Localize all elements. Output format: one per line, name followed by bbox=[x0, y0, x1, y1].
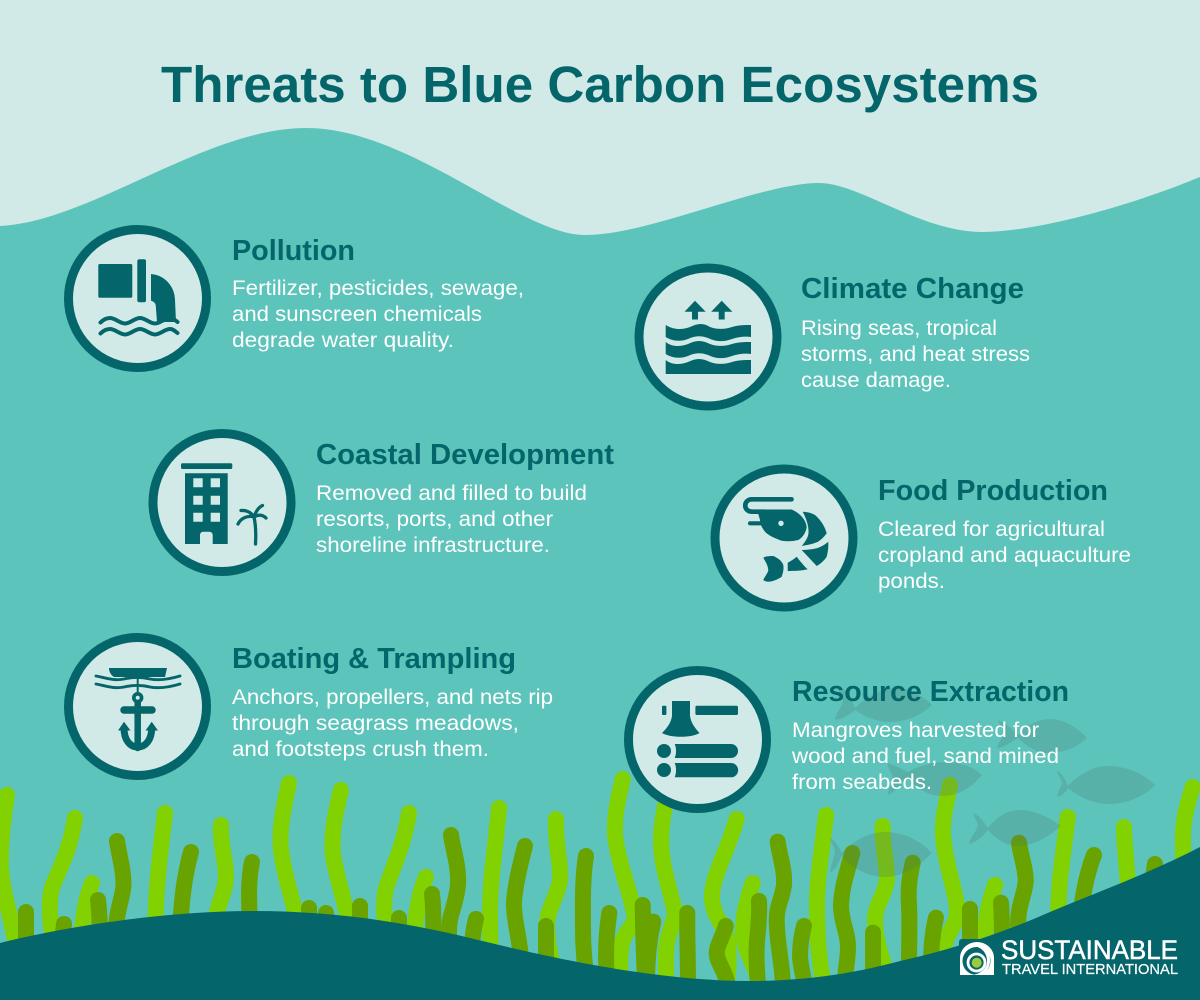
text block: storms, and heat stress bbox=[801, 342, 1030, 366]
fish school bbox=[830, 685, 1155, 877]
text block: wood and fuel, sand mined bbox=[791, 744, 1059, 768]
icon: shrimp bbox=[715, 469, 853, 607]
panel: boating and trampling bbox=[68, 638, 553, 776]
icon: boat and anchor bbox=[68, 638, 206, 776]
text block: Cleared for agricultural bbox=[878, 517, 1105, 541]
text block: cropland and aquaculture bbox=[878, 543, 1131, 567]
text block: Mangroves harvested for bbox=[792, 718, 1039, 742]
background: pale sky wave bbox=[0, 0, 1200, 235]
seabed wave bbox=[0, 847, 1200, 1000]
text block bbox=[878, 517, 1131, 593]
title: Threats to Blue Carbon Ecosystems bbox=[161, 56, 1039, 113]
heading: Climate Change bbox=[801, 273, 1024, 305]
icon: hotel and palm tree bbox=[153, 434, 291, 572]
text block: Anchors, propellers, and nets rip bbox=[232, 685, 553, 709]
text block: from seabeds. bbox=[792, 770, 932, 794]
heading: Pollution bbox=[232, 235, 355, 267]
seagrass: light blades bbox=[1, 779, 1193, 985]
fish 2 bbox=[997, 719, 1087, 753]
fish 1 bbox=[835, 685, 932, 722]
fish 5 bbox=[969, 810, 1061, 846]
fish 4 bbox=[1057, 766, 1155, 804]
seagrass: dark blades bbox=[26, 835, 1155, 995]
icon: rising seas bbox=[639, 268, 777, 406]
heading: Coastal Development bbox=[316, 439, 615, 471]
fish 3 bbox=[887, 762, 982, 796]
text block: through seagrass meadows, bbox=[232, 711, 519, 735]
text block: resorts, ports, and other bbox=[316, 507, 553, 531]
text block bbox=[801, 316, 1030, 392]
logo: Sustainable Travel International: TRAVEL INTERNATIONAL bbox=[1002, 961, 1178, 978]
panel: pollution bbox=[68, 230, 524, 368]
text block bbox=[232, 685, 553, 761]
text block: ponds. bbox=[878, 569, 945, 593]
text block bbox=[316, 481, 587, 557]
text block: degrade water quality. bbox=[232, 328, 454, 352]
panel: resource extraction bbox=[628, 670, 1069, 808]
heading: Boating & Trampling bbox=[232, 643, 516, 675]
heading: Food Production bbox=[878, 475, 1108, 507]
text block bbox=[232, 276, 524, 352]
text block: shoreline infrastructure. bbox=[316, 533, 550, 557]
heading: Resource Extraction bbox=[792, 676, 1069, 708]
panel: climate change bbox=[639, 268, 1030, 406]
icon: outflow pipe bbox=[68, 230, 206, 368]
text block bbox=[791, 718, 1059, 794]
text block: and sunscreen chemicals bbox=[232, 302, 482, 326]
text block: and footsteps crush them. bbox=[232, 737, 489, 761]
panel: coastal development bbox=[153, 434, 615, 572]
logo: Sustainable Travel International: SUSTAINABLE bbox=[1001, 935, 1178, 965]
fish 6 bbox=[830, 832, 932, 877]
icon: axe and logs bbox=[628, 670, 766, 808]
panel: food production bbox=[715, 469, 1131, 607]
text block: Removed and filled to build bbox=[316, 481, 587, 505]
text block: Fertilizer, pesticides, sewage, bbox=[232, 276, 524, 300]
text block: cause damage. bbox=[801, 368, 951, 392]
logo: Sustainable Travel International bbox=[959, 935, 1178, 978]
text block: Rising seas, tropical bbox=[801, 316, 997, 340]
